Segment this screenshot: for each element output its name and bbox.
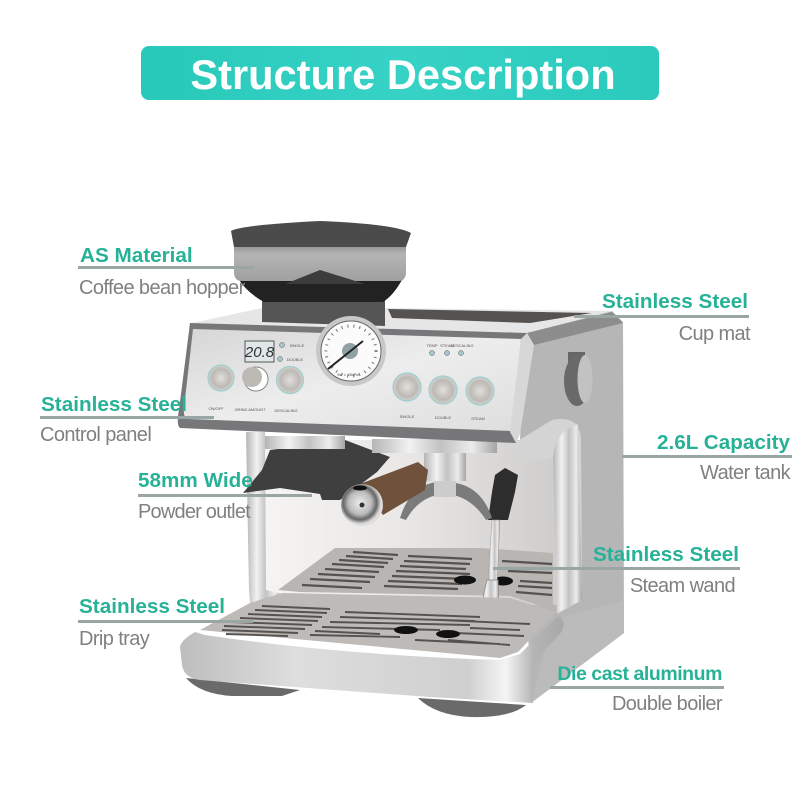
- pressure gauge: 5w × 15bPa: [337, 372, 359, 377]
- grind knob: [242, 367, 268, 391]
- LCD display: 20.8: [244, 344, 275, 361]
- callout: water tank: [622, 431, 792, 484]
- callout: water tank: 2.6L Capacity: [657, 431, 790, 454]
- button labels: DOUBLE: [435, 415, 452, 420]
- callout: control panel: Control panel: [40, 424, 151, 446]
- button labels: TEMP: [426, 343, 438, 348]
- button labels: SINGLE: [290, 343, 305, 348]
- back wall behind the group head: [255, 440, 560, 605]
- button labels: SINGLE: [400, 414, 415, 419]
- callout: drip tray: [78, 595, 253, 650]
- indicator lights: [278, 342, 464, 362]
- callout: control panel: Stainless Steel: [41, 393, 187, 416]
- button labels: DESCALING: [274, 408, 298, 413]
- button labels: STEAM: [471, 416, 485, 421]
- wooden handle: [360, 462, 428, 515]
- rear drip grate: [278, 548, 553, 610]
- callout: powder outlet: Powder outlet: [138, 501, 251, 523]
- callout: cup mat: Cup mat: [679, 323, 751, 345]
- button labels: [208, 343, 485, 421]
- cup mat tray on top: [192, 308, 623, 345]
- callout: powder outlet: [138, 469, 312, 523]
- callout: coffee bean hopper: [78, 244, 253, 299]
- callout: drip tray: Stainless Steel: [79, 595, 225, 618]
- title banner: Structure Description: [190, 51, 616, 98]
- right column: [516, 419, 582, 614]
- button labels: STEAM: [440, 343, 454, 348]
- left column: [246, 432, 282, 603]
- button labels: DESCALING: [450, 343, 474, 348]
- callout: control panel: [40, 393, 214, 446]
- espresso machine illustration: [178, 221, 624, 717]
- water tank knob: [564, 352, 592, 406]
- machine right side housing: [520, 311, 624, 703]
- callout: cup mat: Stainless Steel: [602, 290, 748, 313]
- callout: steam wand: Steam wand: [630, 575, 735, 597]
- callout: water tank: Water tank: [700, 462, 792, 484]
- callout: double boiler: Double boiler: [612, 693, 723, 715]
- callout: double boiler: Die cast aluminum: [557, 663, 722, 685]
- callout: powder outlet: 58mm Wide: [138, 469, 253, 492]
- callout: coffee bean hopper: AS Material: [80, 244, 193, 267]
- button labels: DOUBLE: [287, 357, 304, 362]
- round buttons: [208, 365, 494, 405]
- group head and portafilter: [341, 439, 497, 526]
- machine feet: [186, 678, 526, 717]
- button labels: ON/OFF: [208, 406, 224, 411]
- front drip tray: [200, 593, 556, 658]
- callout: steam wand: [493, 543, 740, 597]
- chrome handle end: [341, 484, 383, 526]
- callout: cup mat: [574, 290, 751, 345]
- stainless base front: [180, 616, 564, 703]
- lower right base side: [531, 600, 624, 703]
- callout: double boiler: [550, 663, 724, 715]
- front control panel: [178, 323, 534, 443]
- portafilter cradle: [243, 436, 390, 500]
- pressure gauge: [316, 316, 386, 386]
- callout: steam wand: Stainless Steel: [593, 543, 739, 566]
- callout: drip tray: Drip tray: [79, 628, 150, 650]
- steam wand: [481, 468, 518, 613]
- button labels: GRIND AMOUNT: [234, 407, 266, 412]
- bean hopper: [231, 221, 411, 326]
- callout: coffee bean hopper: Coffee bean hopper: [79, 277, 246, 299]
